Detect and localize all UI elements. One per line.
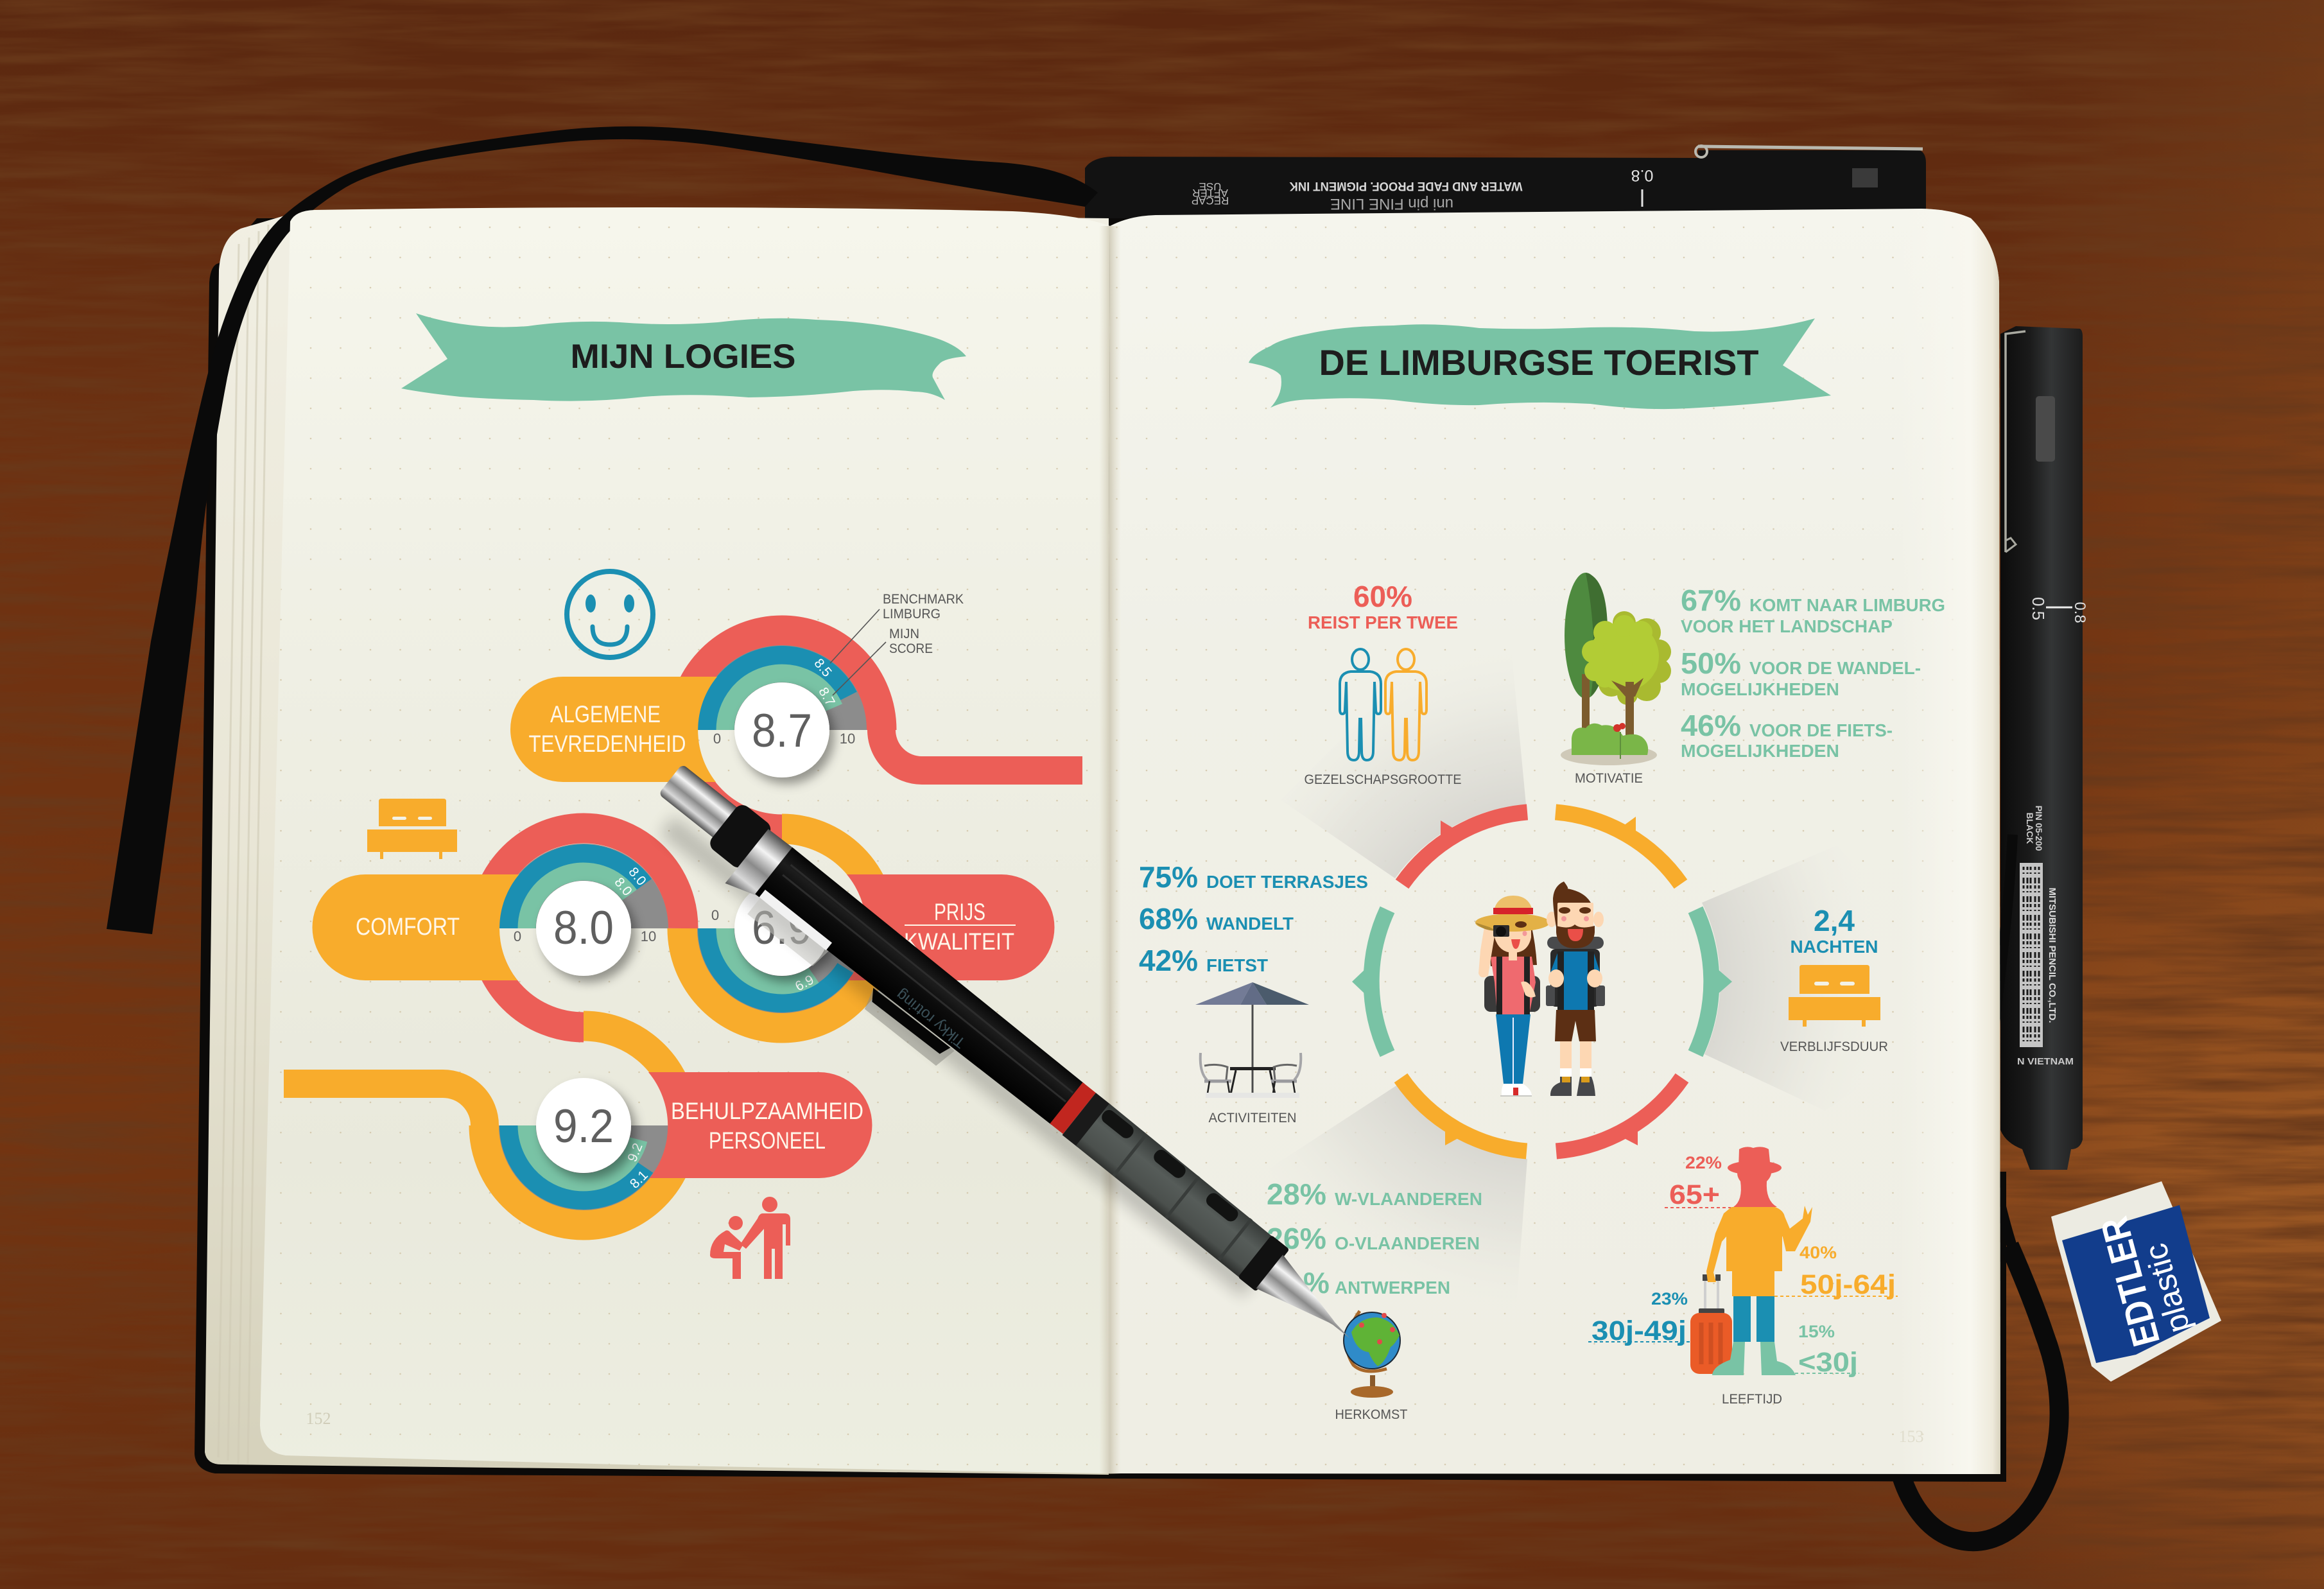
banner: mijn logies (401, 313, 966, 401)
text block: motivatie stats: VOOR DE WANDEL- (1749, 658, 1921, 678)
score: 8.0: 10 (641, 928, 656, 944)
score: 8.7 (713, 682, 855, 777)
text block: motivatie stats (1681, 584, 1945, 761)
pill: prijs kwaliteit: PRIJS (934, 899, 985, 925)
eraser: plastic (2137, 1240, 2197, 1337)
illustration: age silhouette (1690, 1147, 1812, 1375)
gauge: behulpzaamheid: 8.1 (627, 1168, 651, 1192)
text block: motivatie stats: KOMT NAAR LIMBURG (1749, 595, 1945, 615)
icon: bed comfort (367, 799, 457, 859)
gauge: comfort (508, 854, 650, 928)
banner: de limburgse toerist (1249, 318, 1831, 409)
mechanical pencil: Tikky rotring (893, 986, 969, 1052)
icon: smiley (567, 571, 653, 657)
pill: behulpzaamheid personeel: BEHULPZAAMHEID (671, 1098, 863, 1124)
callout: benchmark and mijn score: MIJN (889, 627, 919, 641)
gauge: behulpzaamheid: 9.2 (625, 1141, 646, 1164)
age labels: <30j (1798, 1347, 1858, 1378)
banner title right: DE LIMBURGSE TOERIST (1319, 342, 1759, 383)
label: leeftijd: LEEFTIJD (1722, 1392, 1782, 1407)
age labels: 15% (1798, 1322, 1835, 1341)
pill: algemene tevredenheid: ALGEMENE (550, 701, 661, 727)
text block: activiteiten stats: 42% (1139, 944, 1198, 977)
ring arrow notches (1352, 817, 1732, 1145)
pill: behulpzaamheid personeel: PERSONEEL (709, 1127, 826, 1154)
text block: herkomst stats: O-VLAANDEREN (1335, 1233, 1480, 1253)
text block: activiteiten stats: DOET TERRASJES (1206, 872, 1368, 892)
panel: de limburgse toerist wheel (1139, 573, 1945, 1422)
age labels: 22% (1685, 1153, 1722, 1172)
age labels (1588, 1153, 1898, 1378)
pill: comfort (312, 874, 519, 980)
bookmark ribbon top (107, 126, 1098, 934)
eraser (2051, 1181, 2221, 1382)
icon: terrace umbrella and table (1195, 982, 1309, 1098)
callout: benchmark and mijn score: LIMBURG (883, 607, 941, 621)
callout: benchmark and mijn score: BENCHMARK (883, 592, 964, 607)
fine-liner pen above the notebook: RECAP (1192, 195, 1229, 207)
right page (1106, 209, 2000, 1474)
pill: behulpzaamheid personeel (648, 1072, 872, 1178)
block: reist per twee: 60% (1353, 580, 1412, 613)
text block: motivatie stats: MOGELIJKHEDEN (1681, 679, 1839, 699)
text block: activiteiten stats: 75% (1139, 860, 1198, 894)
pill: prijs kwaliteit: KWALITEIT (904, 928, 1014, 955)
text block: activiteiten stats: FIETST (1206, 955, 1268, 975)
notebook cover (195, 218, 2006, 1482)
spine gutter (1099, 226, 1121, 1474)
gauge: comfort: 8.0 (625, 865, 649, 889)
fine-liner pen right of the notebook: N VIETNAM (2017, 1056, 2074, 1067)
score: 8.7: 8.7 (752, 705, 812, 757)
left page (260, 207, 1110, 1473)
score: 9.2: 9.2 (553, 1100, 614, 1152)
text block: activiteiten stats (1139, 860, 1368, 977)
text block: activiteiten stats: 68% (1139, 902, 1198, 935)
score: 8.0: 8.0 (553, 902, 614, 954)
icon: bed verblijfsduur (1789, 965, 1880, 1027)
flow tracks (284, 630, 1082, 1225)
text block: motivatie stats: VOOR DE FIETS- (1749, 720, 1893, 740)
illustration: man tourist (1546, 881, 1605, 1096)
label: activiteiten: ACTIVITEITEN (1208, 1111, 1297, 1125)
score: 8.7: 0 (713, 731, 721, 747)
score: 8.7: 10 (840, 731, 855, 747)
score: 6.9: 0 (711, 907, 719, 923)
fine-liner pen above the notebook: uni pin FINE LINE (1330, 195, 1453, 213)
panel: mijn logies scores (284, 571, 1082, 1279)
text block: nachten (1790, 904, 1878, 957)
block: reist per twee: REIST PER TWEE (1308, 612, 1458, 632)
icon: orange person (1385, 649, 1426, 760)
age labels: 30j-49j (1591, 1315, 1687, 1346)
text block: herkomst stats: ANTWERPEN (1335, 1278, 1450, 1298)
pill: algemene tevredenheid (510, 677, 717, 782)
icon: trees (1561, 573, 1671, 765)
score: 6.9 (711, 881, 829, 976)
text block: herkomst stats (1267, 1177, 1482, 1299)
right page: 153 (1899, 1427, 1923, 1446)
ring segments (1371, 812, 1712, 1151)
gauge: algemene tevredenheid: 8.5 (811, 656, 835, 680)
pill: algemene tevredenheid: TEVREDENHEID (529, 731, 686, 757)
fine-liner pen right of the notebook: BLACK (2025, 813, 2035, 844)
age labels: 65+ (1669, 1179, 1720, 1210)
callout: benchmark and mijn score: SCORE (889, 641, 933, 656)
bookmark ribbon bottom (1902, 835, 2060, 1541)
fine-liner pen above the notebook: 0.8 (1631, 166, 1653, 184)
illustration: woman tourist (1475, 896, 1550, 1097)
score: 6.9: 6.9 (752, 902, 812, 954)
fine-liner pen above the notebook: USE (1199, 180, 1221, 193)
mechanical pencil (634, 758, 1375, 1373)
pill: prijs kwaliteit (847, 874, 1054, 980)
page stack left (205, 211, 1109, 1475)
block: reist per twee (1305, 580, 1461, 787)
gauge: algemene tevredenheid: 8.7 (815, 685, 838, 709)
icon: blue person (1340, 649, 1381, 760)
score: 8.0 (514, 881, 656, 976)
text block: motivatie stats: 50% (1681, 647, 1741, 680)
text block: activiteiten stats: WANDELT (1206, 914, 1294, 933)
pill: comfort: COMFORT (356, 914, 460, 941)
gauge: algemene tevredenheid (707, 655, 849, 730)
text block: nachten: 2,4 (1814, 904, 1855, 937)
fine-liner pen above the notebook (1085, 146, 1926, 218)
gauge: prijs kwaliteit: 6.9 (793, 972, 817, 994)
label: herkomst: HERKOMST (1335, 1407, 1408, 1422)
icon: helping person (710, 1197, 790, 1279)
age labels: 50j-64j (1800, 1269, 1896, 1300)
fine-liner pen above the notebook: AFTER (1192, 187, 1228, 199)
fine-liner pen right of the notebook (2000, 326, 2088, 1170)
score: 8.0: 0 (514, 928, 521, 944)
fine-liner pen above the notebook: WATER AND FADE PROOF. PIGMENT INK (1289, 179, 1523, 193)
text block: motivatie stats: 67% (1681, 584, 1741, 617)
text block: herkomst stats: 26% (1267, 1222, 1326, 1255)
banner title left: MIJN LOGIES (570, 338, 796, 376)
left page: 152 (306, 1409, 331, 1428)
fine-liner pen right of the notebook: PIN 05-200 (2034, 806, 2044, 851)
gauge: behulpzaamheid (508, 1125, 651, 1200)
label: verblijfsduur: VERBLIJFSDUUR (1780, 1039, 1888, 1054)
text block: herkomst stats: W-VLAANDEREN (1335, 1189, 1482, 1209)
gauge: comfort: 8.0 (611, 875, 635, 899)
age labels: 23% (1651, 1289, 1688, 1308)
eraser: EDTLER (2092, 1213, 2168, 1351)
gauge: prijs kwaliteit (707, 928, 848, 1003)
block: reist per twee: GEZELSCHAPSGROOTTE (1305, 772, 1461, 787)
text block: motivatie stats: MOGELIJKHEDEN (1681, 741, 1839, 761)
text block: motivatie stats: VOOR HET LANDSCHAP (1681, 616, 1893, 636)
fine-liner pen right of the notebook: 0.8 (2071, 602, 2088, 623)
label: motivatie: MOTIVATIE (1575, 771, 1643, 786)
text block: herkomst stats: 28% (1267, 1177, 1326, 1211)
score: 9.2 (536, 1078, 631, 1173)
fine-liner pen right of the notebook: MITSUBISHI PENCIL CO.,LTD. (2047, 887, 2058, 1023)
icon: globe (1344, 1311, 1400, 1398)
text block: herkomst stats: % (1303, 1266, 1330, 1299)
age labels: 40% (1799, 1243, 1837, 1262)
fine-liner pen right of the notebook: 0.5 (2029, 597, 2048, 620)
text block: motivatie stats: 46% (1681, 709, 1741, 742)
shaded wedges (1263, 636, 1900, 1314)
callout: benchmark and mijn score (830, 592, 964, 695)
text block: nachten: NACHTEN (1790, 937, 1878, 957)
